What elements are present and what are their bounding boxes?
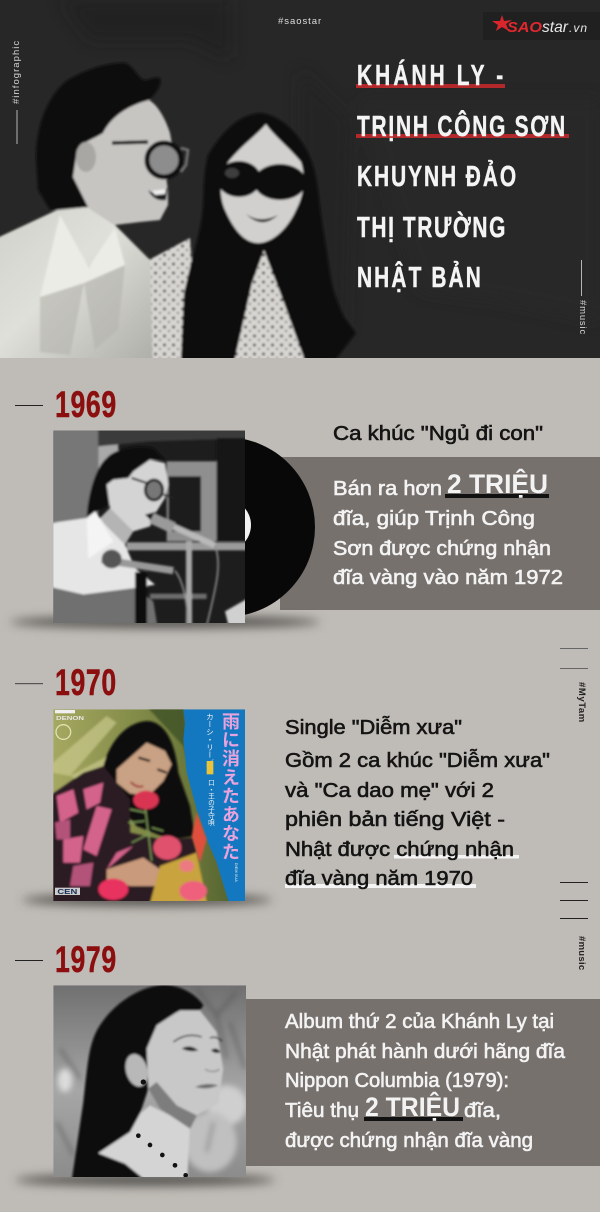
panel: 1969 <box>10 384 600 638</box>
description: 2 TRIỆU <box>365 1091 460 1122</box>
description: và "Ca dao mẹ" với 2 <box>285 779 494 802</box>
description <box>285 1010 566 1152</box>
title line 2: TRỊNH CÔNG SƠN <box>357 108 565 143</box>
side tag: music: #music <box>576 936 587 971</box>
album cover: Diễm xưa single: 雨に消えたあなた <box>220 712 240 861</box>
description: Nhật được chứng nhận <box>285 838 514 861</box>
title line 3: KHUYNH ĐẢO <box>357 158 516 193</box>
year: 1969: 1969 <box>55 384 116 425</box>
text band <box>246 999 600 1166</box>
vinyl record <box>135 437 315 617</box>
album shadow <box>22 894 272 906</box>
side tag: MyTam: #MyTam <box>576 682 587 723</box>
description: đĩa vàng vào năm 1972 <box>333 566 563 589</box>
description: Nippon Columbia (1979): <box>285 1069 509 1092</box>
description: Bán ra hơn <box>333 477 442 500</box>
description: phiên bản tiếng Việt - <box>285 808 505 831</box>
tag: music header <box>577 260 588 335</box>
description: Album thứ 2 của Khánh Ly tại <box>285 1010 554 1033</box>
portrait: Trịnh Công Sơn <box>0 63 188 380</box>
description: Tiêu thụ <box>285 1099 359 1122</box>
description: Single "Diễm xưa" <box>285 716 462 739</box>
logo: Saostar: .vn <box>569 21 587 35</box>
logo: Saostar: star <box>542 19 569 36</box>
heading: Ngủ đi con: Ca khúc "Ngủ đi con" <box>333 422 543 445</box>
year: 1969 <box>15 384 116 425</box>
album cover: Trịnh Công Sơn with guitar <box>53 430 245 623</box>
description: đĩa, <box>464 1099 501 1122</box>
tag: saostar: #saostar <box>278 16 322 27</box>
title <box>356 59 569 294</box>
album shadow <box>10 616 320 628</box>
panel: 1979 <box>15 939 600 1192</box>
title line 5: NHẬT BẢN <box>357 259 481 294</box>
text band <box>280 457 600 610</box>
description: được chứng nhận đĩa vàng <box>285 1129 533 1152</box>
year: 1979 <box>15 939 116 980</box>
title underline accents <box>356 84 569 138</box>
highlight underlines <box>285 855 519 888</box>
side tag: music <box>560 882 588 971</box>
description: Nhật phát hành dưới hãng đĩa <box>285 1040 566 1063</box>
logo: Saostar: SAO <box>507 19 542 36</box>
album cover: Diễm xưa single: DIEM XUA <box>234 863 239 882</box>
album cover: Diễm xưa single: CEN <box>57 887 77 896</box>
album cover: Diễm xưa single: DENON <box>56 716 84 722</box>
year: 1970 <box>15 662 116 703</box>
year: 1970: 1970 <box>55 662 116 703</box>
album cover: Diễm xưa single: カーシ・リー／ <box>205 712 214 766</box>
tag: music header: #music <box>577 300 588 335</box>
description: đĩa vàng năm 1970 <box>285 867 473 890</box>
panel: 1970 <box>15 662 550 916</box>
description: đĩa, giúp Trịnh Công <box>333 507 535 530</box>
side tag: MyTam <box>560 648 588 723</box>
album cover: Diễm xưa single: 口・王の子守唄 <box>206 779 215 827</box>
description: Sơn được chứng nhận <box>333 537 551 560</box>
portrait: Khánh Ly <box>145 113 356 380</box>
year: 1979: 1979 <box>55 939 116 980</box>
description: 2 TRIỆU <box>447 468 548 499</box>
title line 4: THỊ TRƯỜNG <box>357 209 505 244</box>
logo: Saostar <box>483 12 600 40</box>
title line 1: KHÁNH LY - <box>357 59 503 92</box>
tag: infographic <box>11 40 22 144</box>
album cover: Diễm xưa single <box>53 709 245 901</box>
description <box>285 716 550 890</box>
panel: header <box>0 0 600 380</box>
description <box>333 468 563 589</box>
description: Gồm 2 ca khúc "Diễm xưa" <box>285 749 550 772</box>
album shadow <box>15 1174 275 1186</box>
album cover: Khánh Ly portrait <box>53 985 247 1192</box>
tag: infographic: #infographic <box>11 40 22 104</box>
